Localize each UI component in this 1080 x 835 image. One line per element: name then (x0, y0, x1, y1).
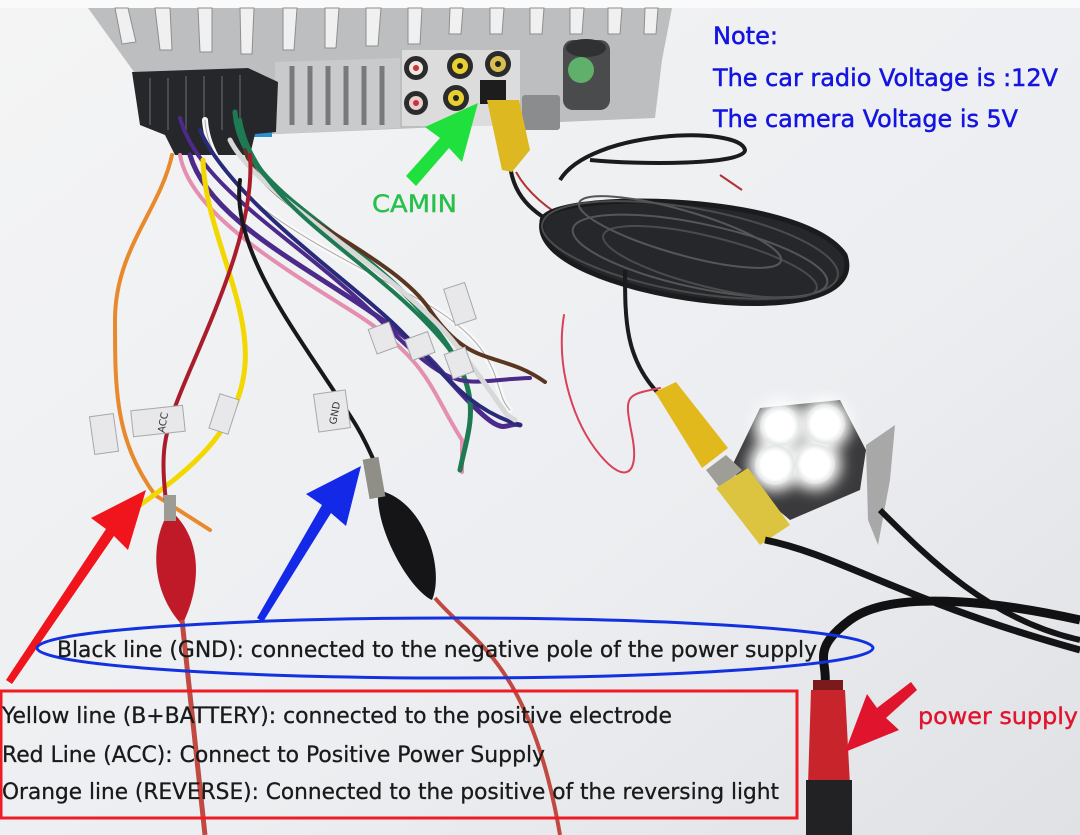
note text: The car radio Voltage is :12V (712, 64, 1059, 92)
wire tags (89, 283, 476, 454)
callout: power wires box (1, 691, 797, 818)
note text (712, 22, 1059, 133)
loose red camera wire (562, 315, 660, 472)
camera with LEDs (730, 398, 895, 545)
black GND wire (239, 180, 376, 465)
yellow wire (140, 160, 245, 505)
note text: The camera Voltage is 5V (712, 105, 1019, 133)
CAMIN label and green arrow (372, 103, 478, 218)
callout: power wires box: Orange line (REVERSE): Connected to the positive of the reversing light (2, 780, 779, 805)
callout: black line ellipse: Black line (GND): connected to the negative pole of the power supply (57, 638, 817, 663)
fuse (254, 95, 272, 137)
power supply label and arrow: power supply (918, 704, 1078, 730)
black alligator clip (363, 457, 560, 835)
note text: Note: (713, 22, 778, 50)
coiled black camera cable (535, 135, 847, 395)
red alligator clip (156, 495, 205, 835)
RCA connector block (402, 50, 520, 126)
wiring plug (132, 68, 278, 155)
power supply label and arrow (845, 682, 1078, 752)
wire tags: ACC (157, 412, 171, 434)
main yellow RCA plug on radio (480, 80, 695, 265)
red wire (163, 155, 250, 520)
wire tags: GND (328, 401, 343, 425)
callout: black line ellipse (37, 618, 873, 678)
power supply connector (806, 601, 1080, 835)
camera yellow RCA connectors (655, 382, 1080, 650)
CAMIN label and green arrow: CAMIN (372, 190, 457, 218)
callout: power wires box: Red Line (ACC): Connect to Positive Power Supply (2, 743, 545, 768)
orange wire (115, 155, 210, 530)
blue arrow to black clip (257, 466, 361, 622)
wire harness (115, 112, 660, 530)
callout: power wires box: Yellow line (B+BATTERY): connected to the positive electrode (1, 704, 672, 729)
car radio back panel (88, 8, 672, 155)
red arrow to yellow and red wires (6, 490, 146, 684)
